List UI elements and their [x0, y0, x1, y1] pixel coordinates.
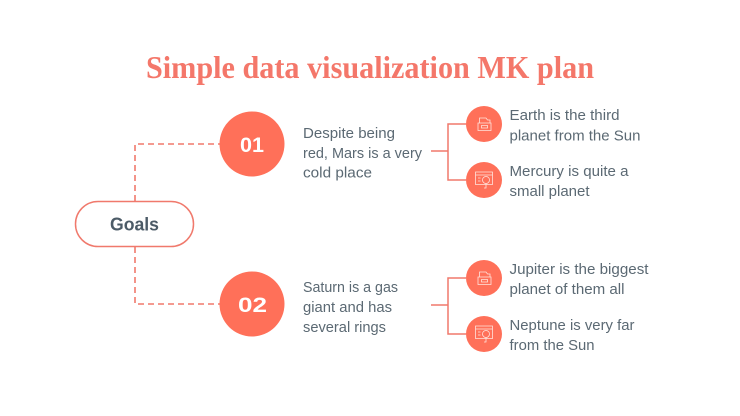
text block: Saturn: giant and has — [303, 300, 392, 316]
text block: Mars: Despite being — [303, 126, 395, 142]
icon: magnifier, Mercury — [466, 162, 502, 198]
text block: Jupiter — [510, 262, 648, 298]
text block: Earth: planet from the Sun — [510, 128, 640, 144]
text block: Saturn: Saturn is a gas — [303, 280, 398, 296]
text block: Neptune — [510, 318, 635, 354]
text block: Mars: red, Mars is a very — [303, 146, 423, 162]
text block: Earth: Earth is the third — [510, 108, 620, 124]
icon: folder, Earth — [466, 106, 502, 142]
number badge 01: 01 — [240, 133, 264, 157]
text block: Mars — [303, 126, 423, 182]
icon: folder, Jupiter — [466, 260, 502, 296]
bracket connector 02 — [431, 278, 466, 334]
icon: magnifier, Neptune — [466, 316, 502, 352]
text block: Neptune: from the Sun — [510, 338, 594, 354]
text block: Mars: cold place — [303, 166, 372, 182]
number badge 02: 02 — [238, 293, 267, 317]
title: Simple data visualization MK plan — [146, 49, 594, 85]
dashed connector: goals to 02 — [135, 247, 220, 304]
goals pill — [76, 202, 194, 246]
text block: Mercury — [510, 164, 629, 200]
text block: Jupiter: Jupiter is the biggest — [510, 262, 648, 278]
text block: Neptune: Neptune is very far — [510, 318, 635, 334]
text block: Mercury: small planet — [510, 184, 590, 200]
goals pill: Goals — [110, 214, 159, 234]
text block: Saturn: several rings — [303, 320, 386, 336]
text block: Earth — [510, 108, 640, 144]
text block: Jupiter: planet of them all — [510, 282, 624, 298]
bracket connector 01 — [431, 124, 466, 180]
number badge 01 — [220, 112, 284, 176]
number badge 02 — [220, 272, 284, 336]
text block: Saturn — [303, 280, 398, 336]
dashed connector: goals to 01 — [135, 144, 220, 201]
text block: Mercury: Mercury is quite a — [510, 164, 629, 180]
